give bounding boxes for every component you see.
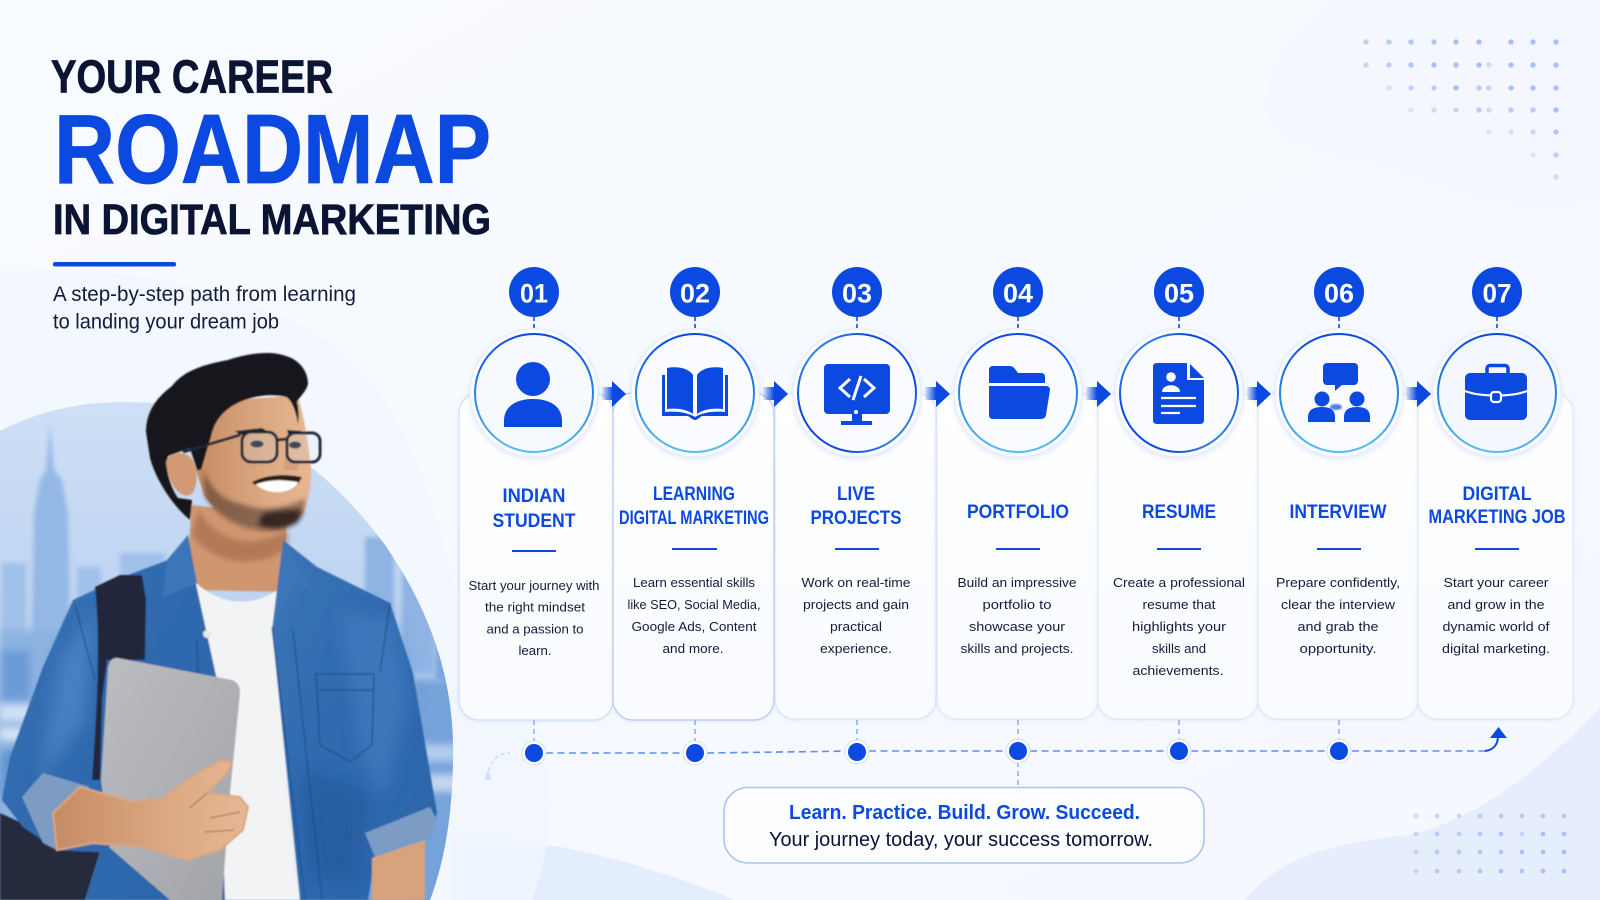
card 6	[1258, 393, 1418, 719]
step 7 text: DIGITAL	[1462, 484, 1532, 505]
step 7 text: and grow in the	[1448, 597, 1544, 612]
step 6 text: clear the interview	[1281, 597, 1396, 612]
step 7 text: Start your career	[1444, 575, 1549, 590]
shirt shading	[40, 610, 410, 880]
step 2 text: Google Ads, Content	[632, 619, 757, 634]
ear	[166, 453, 197, 495]
step 2 header	[631, 267, 759, 457]
step 3 text	[802, 484, 910, 656]
icon: open book	[662, 367, 728, 420]
arrow 3	[925, 381, 950, 407]
title divider	[53, 262, 176, 266]
shirt collars	[163, 535, 197, 597]
step 6 text: Prepare confidently,	[1276, 575, 1400, 590]
step 4 text: PORTFOLIO	[967, 502, 1069, 523]
backpack strap	[92, 575, 146, 780]
subtitle: to landing your dream job	[53, 310, 279, 334]
arrow 5	[1247, 381, 1271, 407]
card 2	[613, 393, 774, 720]
step 4 text: skills and projects.	[960, 641, 1074, 656]
face	[196, 395, 311, 529]
glasses	[183, 432, 320, 462]
step 7 header: 07	[1482, 278, 1512, 308]
step 3 text: PROJECTS	[810, 508, 902, 529]
icon: briefcase	[1465, 366, 1527, 420]
backpack	[0, 813, 100, 900]
finger lines	[190, 793, 240, 832]
step 3 text: projects and gain	[803, 597, 909, 612]
illustration: student with laptop	[0, 353, 437, 900]
step 4 text: portfolio to	[982, 597, 1052, 612]
badge connector lines	[534, 317, 1497, 333]
step 7 text: dynamic world of	[1442, 619, 1550, 634]
step 2 header: 02	[680, 278, 710, 308]
step 3 text: Work on real-time	[802, 575, 910, 590]
icon: folder	[989, 366, 1050, 419]
step 6 text: opportunity.	[1300, 641, 1376, 656]
step 7 text	[1428, 484, 1566, 656]
step 5 text: skills and	[1152, 641, 1206, 656]
laptop	[101, 658, 240, 900]
arrow 1	[602, 381, 626, 407]
callout: Learn. Practice. Build. Grow. Succeed.	[789, 801, 1140, 824]
title	[51, 50, 491, 244]
step 1 text: learn.	[518, 643, 552, 658]
step 6 text: and grab the	[1298, 619, 1378, 634]
subtitle	[53, 283, 356, 334]
step 1 header	[470, 267, 598, 457]
step 3 header: 03	[842, 278, 872, 308]
step 3 text: experience.	[820, 641, 892, 656]
dot pattern bottom right	[1414, 814, 1566, 873]
callout	[724, 788, 1204, 863]
step 3 text: LIVE	[837, 484, 875, 505]
eyes and brows	[235, 428, 302, 448]
neck shadow	[192, 510, 288, 562]
card 5	[1098, 393, 1258, 719]
arrow 4	[1086, 381, 1111, 407]
timeline	[484, 720, 1507, 787]
step 5 text: Create a professional	[1113, 575, 1245, 590]
icon: resume document	[1153, 363, 1204, 424]
chin beard	[258, 510, 302, 528]
card 7	[1418, 393, 1573, 719]
arrow 2	[763, 381, 788, 407]
step 2 text	[619, 484, 769, 656]
card 4	[937, 393, 1098, 719]
step 7 header	[1433, 267, 1561, 457]
icon: interview people with speech bubble	[1308, 363, 1370, 422]
city skyline blob	[0, 395, 465, 900]
arrows between steps	[602, 381, 1431, 407]
step 5 text: highlights your	[1132, 619, 1227, 634]
neck	[186, 505, 288, 592]
hair	[146, 353, 308, 520]
process cards	[459, 393, 1573, 720]
step 1 text: Start your journey with	[468, 578, 600, 593]
step 1 text: and a passion to	[486, 622, 584, 636]
step 1 text	[468, 486, 600, 658]
right cuff	[365, 807, 437, 857]
step 2 text: like SEO, Social Media,	[628, 597, 760, 612]
forearm and hand	[53, 760, 248, 860]
step 2 text: Learn essential skills	[633, 575, 756, 590]
step 6 text	[1276, 502, 1400, 656]
step 1 text: the right mindset	[485, 600, 585, 614]
step 4 text: showcase your	[969, 619, 1066, 634]
title: ROADMAP	[54, 94, 491, 204]
denim shirt right	[272, 540, 437, 900]
shirt button	[203, 630, 211, 638]
step 4 text: Build an impressive	[958, 575, 1076, 590]
right forearm	[372, 840, 425, 900]
timeline nodes	[522, 739, 1351, 765]
step 4 header: 04	[1003, 278, 1033, 308]
card 3	[775, 393, 936, 719]
step 6 header	[1275, 267, 1403, 457]
step 3 text: practical	[830, 619, 882, 634]
step 2 text: LEARNING	[653, 484, 735, 505]
step 6 text: INTERVIEW	[1290, 502, 1387, 523]
nose	[284, 455, 299, 470]
title: YOUR CAREER	[51, 50, 333, 102]
step 5 header	[1115, 267, 1243, 457]
step 2 text: and more.	[662, 641, 724, 656]
denim shirt left	[2, 535, 225, 900]
icon: person	[504, 362, 562, 427]
step 4 header	[954, 267, 1082, 457]
t-shirt	[195, 582, 300, 900]
step 5 text	[1113, 502, 1245, 678]
arrow 6	[1406, 381, 1431, 407]
beard stubble	[203, 470, 305, 530]
step 1 text: STUDENT	[492, 511, 576, 532]
step 1 text: INDIAN	[502, 486, 566, 507]
title: IN DIGITAL MARKETING	[53, 196, 491, 244]
card 1	[459, 393, 613, 720]
arrow: timeline end	[1485, 727, 1507, 751]
step 5 text: resume that	[1142, 597, 1216, 612]
step 5 text: achievements.	[1132, 663, 1224, 678]
subtitle: A step-by-step path from learning	[53, 283, 356, 306]
icon: code monitor	[824, 364, 890, 425]
step 6 header: 06	[1324, 278, 1354, 308]
step 7 text: digital marketing.	[1442, 641, 1550, 656]
left cuff	[22, 773, 90, 850]
mouth	[252, 475, 302, 492]
step 5 text: RESUME	[1142, 502, 1216, 523]
step 2 text: DIGITAL MARKETING	[619, 508, 769, 529]
dot pattern top right	[1363, 39, 1559, 180]
shirt placket and pocket	[75, 603, 390, 900]
step 5 header: 05	[1164, 278, 1194, 308]
callout: Your journey today, your success tomorrow.	[769, 828, 1153, 851]
step 1 header: 01	[520, 278, 548, 308]
step 7 text: MARKETING JOB	[1428, 507, 1566, 528]
step 3 header	[793, 267, 921, 457]
step 4 text	[958, 502, 1076, 656]
